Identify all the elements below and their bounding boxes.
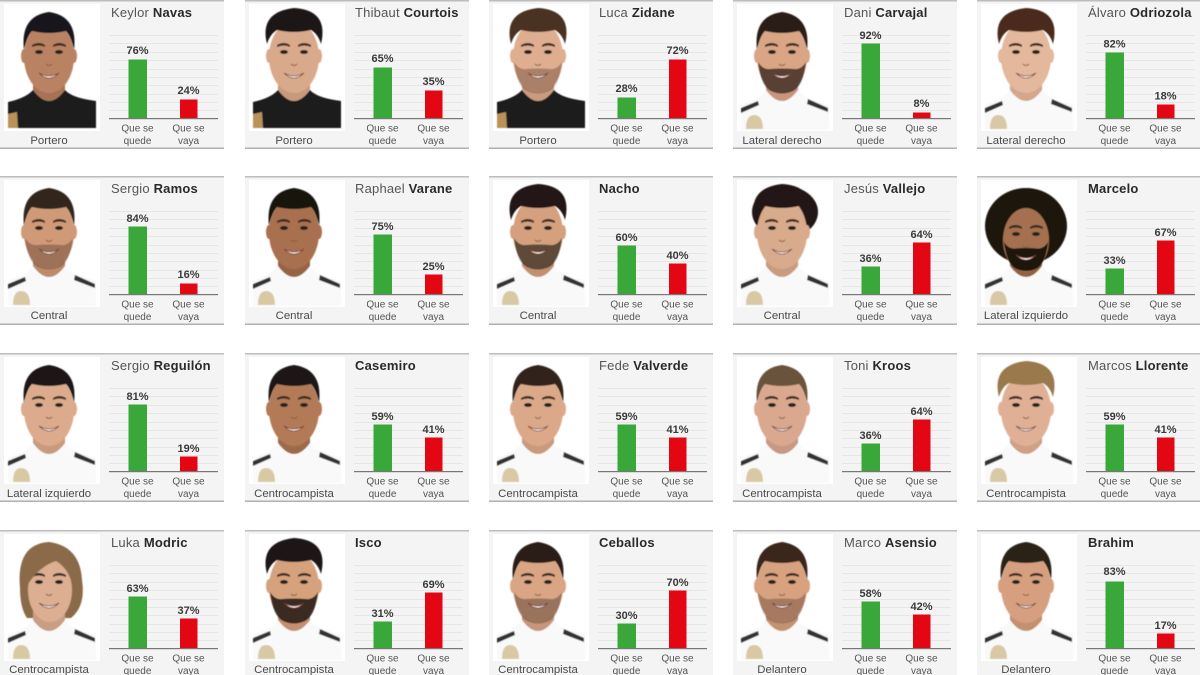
position: Centrocampista [498,488,579,500]
bar chart: 36 / 64: quede [857,489,885,500]
card: Raphael Varane [245,176,469,325]
bar chart: 33 / 67 [1086,211,1195,323]
bar chart: 59 / 41: Que se [1098,476,1131,488]
bar chart: 36 / 64: 36% [859,253,882,265]
position: Centrocampista [742,488,823,500]
card: Marcos Llorente [977,353,1200,502]
bar chart: 82 / 18: 18% [1154,90,1177,102]
bar chart: 63 / 37 [109,565,218,675]
bar chart: 33 / 67: Que se [1098,300,1131,310]
photo: Luca Zidane [497,8,585,128]
bar chart: 60 / 40: quede [613,312,641,323]
card: Marco Asensio [733,530,957,675]
bar chart: 84 / 16 [109,211,218,323]
bar chart: 33 / 67: Que se [1149,300,1182,310]
name: Alvaro Odriozola: Álvaro Odriozola [1088,5,1192,20]
photo: Isco [253,538,341,660]
name: Ceballos: Ceballos [599,535,655,550]
bar chart: 65 / 35 [354,35,463,147]
bar chart: 36 / 64: Que se [854,300,887,310]
bar chart: 31 / 69 [354,565,463,675]
bar chart: 76 / 24 [109,35,218,147]
bar chart: 31 / 69: 69% [422,579,445,591]
bar chart: 59 / 41: 41% [1154,424,1177,436]
name: Nacho: Nacho [599,181,640,196]
bar chart: 84 / 16: 84% [126,213,149,225]
bar chart: 75 / 25: 75% [371,221,394,233]
bar chart: 28 / 72: vaya [667,136,688,147]
card: Luca Zidane [489,0,713,149]
name: Sergio Reguilon: Sergio Reguilón [111,358,211,373]
bar chart: 58 / 42: 42% [910,601,933,613]
photo: Thibaut Courtois [253,8,341,128]
card: Ceballos [489,530,713,675]
photo: Marco Asensio [741,542,829,660]
bar chart: 58 / 42: Que se [854,654,887,664]
bar chart: 59 / 41: 41% [666,424,689,436]
photo: Nacho [497,184,585,306]
name: Luka Modric: Luka Modric [111,535,188,550]
bar chart: 60 / 40: vaya [667,312,688,323]
bar chart: 59 / 41: Que se [366,476,399,488]
bar chart: 83 / 17 [1086,565,1195,675]
bar chart: 76 / 24: 76% [126,45,149,57]
bar chart: 82 / 18: 82% [1103,38,1126,50]
bar chart: 65 / 35: quede [369,136,397,147]
bar chart: 76 / 24: Que se [172,124,205,134]
bar chart: 58 / 42: Que se [905,654,938,664]
bar chart: 33 / 67: vaya [1155,312,1176,323]
bar chart: 30 / 70: 70% [666,577,689,589]
bar chart: 33 / 67: quede [1101,312,1129,323]
position: Central [764,310,800,322]
bar chart: 83 / 17: Que se [1149,654,1182,664]
position: Central [276,310,312,322]
bar chart: 60 / 40: Que se [610,300,643,310]
card: Jesus Vallejo [733,176,957,325]
name: Isco: Isco [355,535,382,550]
bar chart: 81 / 19: Que se [121,476,154,488]
bar chart: 36 / 64: 64% [910,229,933,241]
bar chart: 59 / 41 [598,388,707,500]
bar chart: 76 / 24: quede [124,136,152,147]
name: Raphael Varane: Raphael Varane [355,181,452,196]
bar chart: 58 / 42 [842,565,951,675]
photo: Brahim [985,542,1073,660]
bar chart: 59 / 41: quede [1101,489,1129,500]
card: Sergio Reguilon [0,353,224,502]
bar chart: 76 / 24: Que se [121,124,154,134]
bar chart: 59 / 41: quede [369,489,397,500]
bar chart: 59 / 41: vaya [423,489,444,500]
card: Brahim [977,530,1200,675]
bar chart: 33 / 67: 67% [1154,227,1177,239]
bar chart: 82 / 18: quede [1101,136,1129,147]
bar chart: 59 / 41: Que se [417,476,450,488]
bar chart: 75 / 25: vaya [423,312,444,323]
photo: Alvaro Odriozola [985,8,1073,130]
bar chart: 84 / 16: vaya [178,312,199,323]
card: Isco [245,530,469,675]
name: Casemiro: Casemiro [355,358,416,373]
bar chart: 60 / 40: 40% [666,250,689,262]
photo: Raphael Varane [253,188,341,306]
bar chart: 59 / 41: quede [613,489,641,500]
bar chart: 30 / 70 [598,565,707,675]
bar chart: 59 / 41: 41% [422,424,445,436]
bar chart: 60 / 40: Que se [661,300,694,310]
bar chart: 65 / 35: 35% [422,76,445,88]
bar chart: 36 / 64: vaya [911,489,932,500]
bar chart: 92 / 8: Que se [905,124,938,134]
bar chart: 81 / 19: 19% [177,443,200,455]
name: Dani Carvajal: Dani Carvajal [844,5,928,20]
bar chart: 83 / 17: Que se [1098,654,1131,664]
bar chart: 81 / 19: quede [124,489,152,500]
bar chart: 59 / 41: 59% [371,411,394,423]
bar chart: 60 / 40: 60% [615,232,638,244]
photo: Dani Carvajal [741,12,829,130]
bar chart: 82 / 18: Que se [1149,124,1182,134]
bar chart: 36 / 64: Que se [854,476,887,488]
bar chart: 28 / 72 [598,35,707,147]
bar chart: 76 / 24: 24% [177,85,200,97]
bar chart: 59 / 41: vaya [1155,489,1176,500]
name: Toni Kroos: Toni Kroos [844,358,911,373]
bar chart: 31 / 69: Que se [366,654,399,664]
bar chart: 75 / 25 [354,211,463,323]
bar chart: 75 / 25: Que se [417,300,450,310]
name: Marcelo: Marcelo [1088,181,1139,196]
bar chart: 75 / 25: quede [369,312,397,323]
card: Thibaut Courtois [245,0,469,149]
card: Toni Kroos [733,353,957,502]
name: Jesus Vallejo: Jesús Vallejo [844,181,925,196]
name: Thibaut Courtois: Thibaut Courtois [355,5,459,20]
card: Alvaro Odriozola [977,0,1200,149]
position: Centrocampista [986,488,1067,500]
bar chart: 84 / 16: Que se [172,300,205,310]
bar chart: 84 / 16: 16% [177,269,200,281]
bar chart: 63 / 37: Que se [172,654,205,664]
bar chart: 33 / 67: 33% [1103,255,1126,267]
bar chart: 36 / 64 [842,211,951,323]
bar chart: 60 / 40 [598,211,707,323]
position: Portero [275,135,313,147]
card: Casemiro [245,353,469,502]
bar chart: 31 / 69: Que se [417,654,450,664]
bar chart: 36 / 64: 64% [910,406,933,418]
bar chart: 36 / 64: quede [857,312,885,323]
name: Brahim: Brahim [1088,535,1134,550]
bar chart: 81 / 19 [109,388,218,500]
photo: Casemiro [253,365,341,483]
bar chart: 82 / 18 [1086,35,1195,147]
bar chart: 84 / 16: Que se [121,300,154,310]
name: Marcos Llorente: Marcos Llorente [1088,358,1189,373]
bar chart: 59 / 41: Que se [1149,476,1182,488]
position: Lateral izquierdo [7,488,91,500]
photo: Fede Valverde [497,365,585,483]
bar chart: 58 / 42: 58% [859,588,882,600]
bar chart: 65 / 35: Que se [366,124,399,134]
bar chart: 81 / 19: vaya [178,489,199,500]
bar chart: 59 / 41: vaya [667,489,688,500]
bar chart: 36 / 64: Que se [905,300,938,310]
bar chart: 65 / 35: 65% [371,53,394,65]
bar chart: 59 / 41: Que se [610,476,643,488]
bar chart: 82 / 18: Que se [1098,124,1131,134]
bar chart: 84 / 16: quede [124,312,152,323]
bar chart: 92 / 8: 92% [859,30,882,42]
bar chart: 82 / 18: vaya [1155,136,1176,147]
photo: Sergio Reguilon [8,365,96,483]
photo: Luka Modric [8,542,96,660]
position: Central [520,310,556,322]
bar chart: 28 / 72: 28% [615,83,638,95]
position: Lateral derecho [742,135,822,147]
bar chart: 81 / 19: 81% [126,391,149,403]
bar chart: 36 / 64: vaya [911,312,932,323]
bar chart: 59 / 41: 59% [615,411,638,423]
bar chart: 63 / 37: Que se [121,654,154,664]
photo: Jesus Vallejo [741,184,829,306]
bar chart: 75 / 25: 25% [422,261,445,273]
card: Keylor Navas [0,0,224,149]
bar chart: 30 / 70: 30% [615,610,638,622]
name: Keylor Navas: Keylor Navas [111,5,192,20]
bar chart: 59 / 41 [354,388,463,500]
bar chart: 81 / 19: Que se [172,476,205,488]
bar chart: 36 / 64: Que se [905,476,938,488]
bar chart: 92 / 8: quede [857,136,885,147]
position: Lateral izquierdo [984,310,1068,322]
bar chart: 31 / 69: 31% [371,608,394,620]
bar chart: 92 / 8: Que se [854,124,887,134]
position: Centrocampista [254,488,335,500]
bar chart: 36 / 64: 36% [859,430,882,442]
name: Sergio Ramos: Sergio Ramos [111,181,198,196]
photo: Sergio Ramos [8,188,96,306]
bar chart: 63 / 37: 37% [177,605,200,617]
position: Central [31,310,67,322]
photo: Toni Kroos [741,365,829,483]
card: Sergio Ramos [0,176,224,325]
bar chart: 30 / 70: Que se [661,654,694,664]
bar chart: 36 / 64 [842,388,951,500]
card: Dani Carvajal [733,0,957,149]
card: Fede Valverde [489,353,713,502]
bar chart: 28 / 72: Que se [610,124,643,134]
bar chart: 83 / 17: 83% [1103,566,1126,578]
name: Luca Zidane: Luca Zidane [599,5,675,20]
photo: Ceballos [497,542,585,660]
bar chart: 63 / 37: 63% [126,583,149,595]
bar chart: 59 / 41: 59% [1103,411,1126,423]
name: Fede Valverde: Fede Valverde [599,358,688,373]
bar chart: 59 / 41: Que se [661,476,694,488]
name: Marco Asensio: Marco Asensio [844,535,937,550]
bar chart: 75 / 25: Que se [366,300,399,310]
bar chart: 65 / 35: vaya [423,136,444,147]
card: Luka Modric [0,530,224,675]
card: Nacho [489,176,713,325]
bar chart: 59 / 41 [1086,388,1195,500]
bar chart: 92 / 8: vaya [911,136,932,147]
position: Lateral derecho [986,135,1066,147]
bar chart: 83 / 17: 17% [1154,620,1177,632]
position: Portero [519,135,557,147]
photo: Marcos Llorente [985,361,1073,483]
bar chart: 65 / 35: Que se [417,124,450,134]
card: Marcelo [977,176,1200,325]
photo: Keylor Navas [8,12,96,128]
bar chart: 30 / 70: Que se [610,654,643,664]
bar chart: 92 / 8: 8% [914,98,930,110]
bar chart: 76 / 24: vaya [178,136,199,147]
bar chart: 28 / 72: Que se [661,124,694,134]
bar chart: 92 / 8 [842,30,951,147]
photo: Marcelo [985,188,1073,306]
bar chart: 28 / 72: quede [613,136,641,147]
bar chart: 28 / 72: 72% [666,45,689,57]
position: Portero [30,135,68,147]
